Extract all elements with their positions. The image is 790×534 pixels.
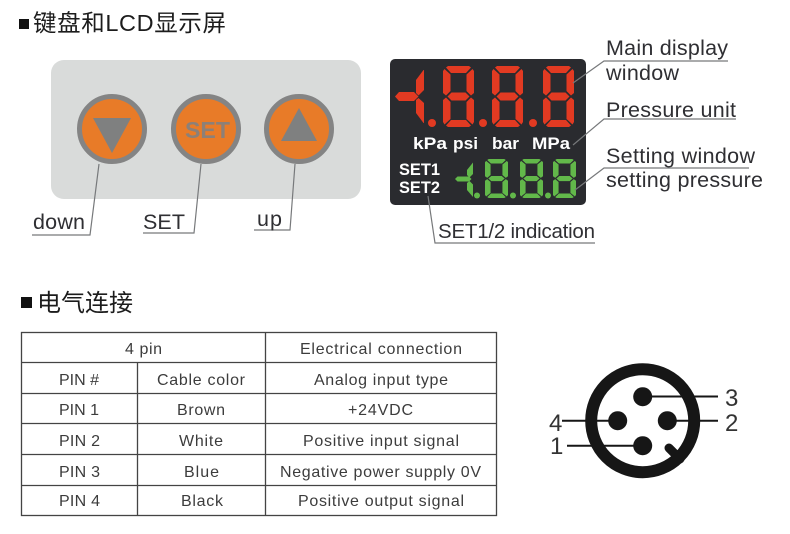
callout: down (32, 164, 99, 235)
row: PIN 2: Positive input signal (303, 433, 459, 450)
row: PIN 2 (59, 433, 459, 450)
row: PIN 4 (59, 493, 464, 510)
callout: SET1/2 indication (428, 196, 595, 243)
row: PIN 1 (59, 402, 413, 419)
row: PIN 3: PIN 3 (59, 464, 100, 481)
header row: Electrical connection (300, 341, 462, 358)
pins (608, 387, 677, 455)
connector diagram: M12 4-pin (549, 369, 738, 472)
pressure units: bar (492, 135, 520, 153)
column header row: Cable color (157, 372, 246, 389)
SET indicators: SET1 (399, 161, 440, 179)
row: PIN 2: White (179, 433, 223, 450)
callout: pressure unit: Pressure unit (606, 98, 736, 122)
column header row: Analog input type (314, 372, 448, 389)
row: PIN 4: Black (181, 493, 224, 510)
pin numbers: 3 (725, 385, 738, 412)
pin leader lines (562, 396, 718, 446)
callout: setting window: setting pressure (606, 168, 763, 192)
main display: red digits (395, 66, 574, 127)
callout: main display window: Main display (606, 36, 728, 60)
pressure units: MPa (532, 135, 571, 153)
pin numbers (549, 385, 738, 460)
callout: down: down (33, 210, 85, 234)
callout: SET1/2 indication: SET1/2 indication (438, 220, 595, 243)
row: PIN 2: PIN 2 (59, 433, 100, 450)
header row: 4 pin (125, 341, 162, 358)
row: PIN 3 (59, 464, 481, 481)
setting display: green digits (455, 159, 576, 198)
row: PIN 1: PIN 1 (59, 402, 99, 419)
column header row (59, 372, 448, 389)
callout: pressure unit (573, 98, 736, 145)
row: PIN 3: Blue (184, 464, 219, 481)
row: PIN 3: Negative power supply 0V (280, 464, 481, 481)
heading: keypad and LCD: 键盘和LCD显示屏 (33, 10, 226, 36)
callout: up: up (257, 207, 282, 231)
key notch (669, 448, 680, 459)
pin numbers: 2 (725, 410, 738, 437)
pressure units: kPa (413, 135, 448, 153)
pin numbers: 1 (550, 433, 563, 460)
callout: SET (143, 164, 201, 234)
callout: SET: SET (143, 210, 185, 234)
button: SET: SET (185, 117, 230, 143)
button: SET (174, 96, 238, 162)
column header row: PIN # (59, 372, 99, 389)
row: PIN 4: Positive output signal (298, 493, 464, 510)
row: PIN 1: +24VDC (348, 402, 413, 419)
panel: keypad (51, 60, 361, 199)
table: pin assignments (21, 332, 497, 516)
row: PIN 4: PIN 4 (59, 493, 100, 510)
callout: main display window (573, 36, 728, 85)
row: PIN 1: Brown (177, 402, 225, 419)
callout: main display window: window (605, 61, 679, 85)
pin numbers: 4 (549, 410, 562, 437)
callout: up (254, 164, 295, 231)
callout: setting window: Setting window (606, 144, 755, 168)
pressure units: psi (453, 135, 478, 153)
heading: electrical connection: 电气连接 (37, 290, 133, 317)
SET indicators: SET2 (399, 179, 440, 197)
panel: LCD display (390, 59, 586, 205)
header row (125, 341, 462, 358)
button: down (80, 96, 144, 162)
callout: setting window (575, 144, 763, 192)
button: up (266, 96, 332, 162)
pressure units (413, 135, 571, 153)
SET indicators (399, 161, 440, 197)
